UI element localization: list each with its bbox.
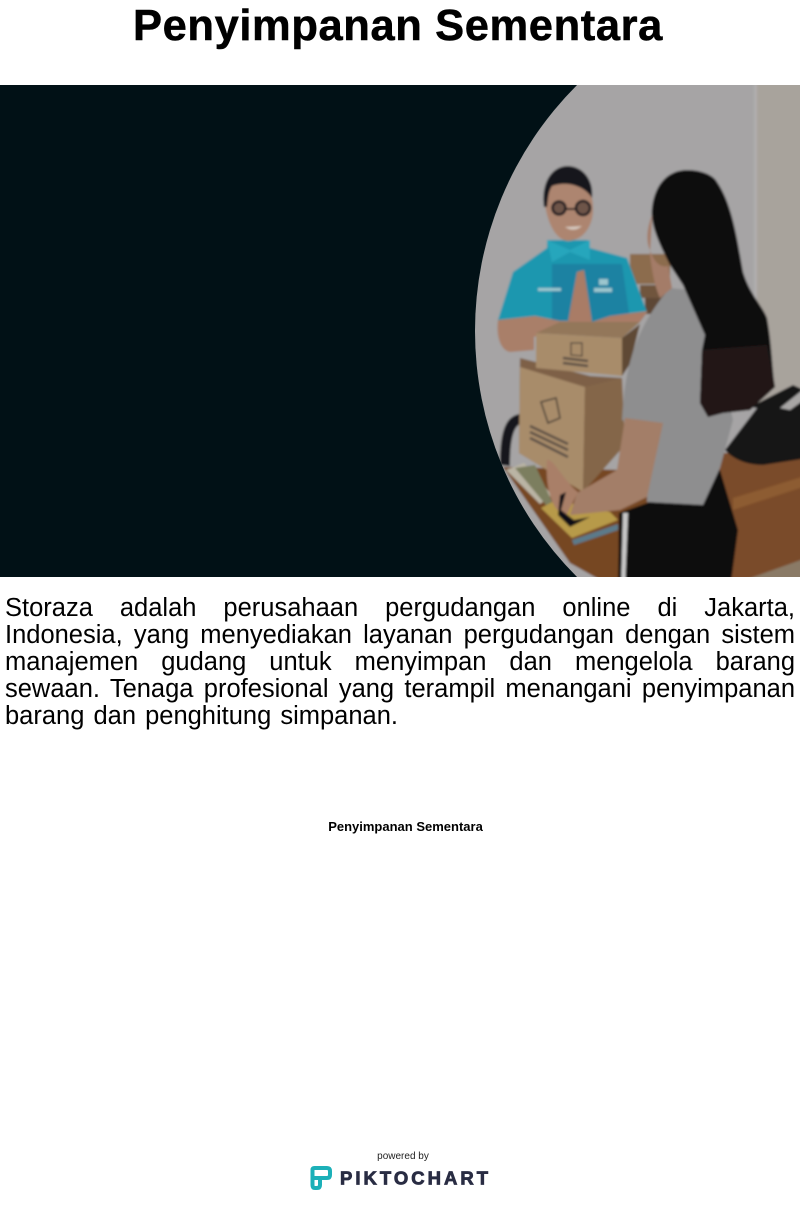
wordmark: PIKTOCHART	[340, 1168, 489, 1188]
wall	[475, 85, 800, 577]
caption: Penyimpanan Sementara	[328, 819, 483, 834]
printer	[725, 385, 800, 465]
man	[498, 166, 648, 352]
body paragraph: manajemen gudang untuk menyimpan dan mengelola barang	[5, 648, 795, 676]
body paragraph	[5, 594, 795, 730]
desk	[503, 466, 650, 577]
papers on desk	[506, 463, 618, 545]
hero photo panel	[0, 85, 800, 577]
title: Penyimpanan Sementara	[133, 2, 663, 50]
body paragraph: barang dan penghitung simpanan.	[5, 702, 398, 730]
chair	[500, 414, 520, 466]
powered by text: powered by	[377, 1151, 429, 1162]
background boxes	[630, 254, 670, 314]
body paragraph: Storaza adalah perusahaan pergudangan online di Jakarta,	[5, 594, 795, 622]
woman	[547, 170, 775, 590]
boxes	[519, 322, 640, 492]
icon: piktochart P mark	[312, 1168, 330, 1188]
piktochart logo	[310, 1166, 489, 1190]
body paragraph: Indonesia, yang menyediakan layanan pergudangan dengan sistem	[5, 621, 795, 649]
body paragraph: sewaan. Tenaga profesional yang terampil menangani penyimpanan	[5, 675, 795, 703]
